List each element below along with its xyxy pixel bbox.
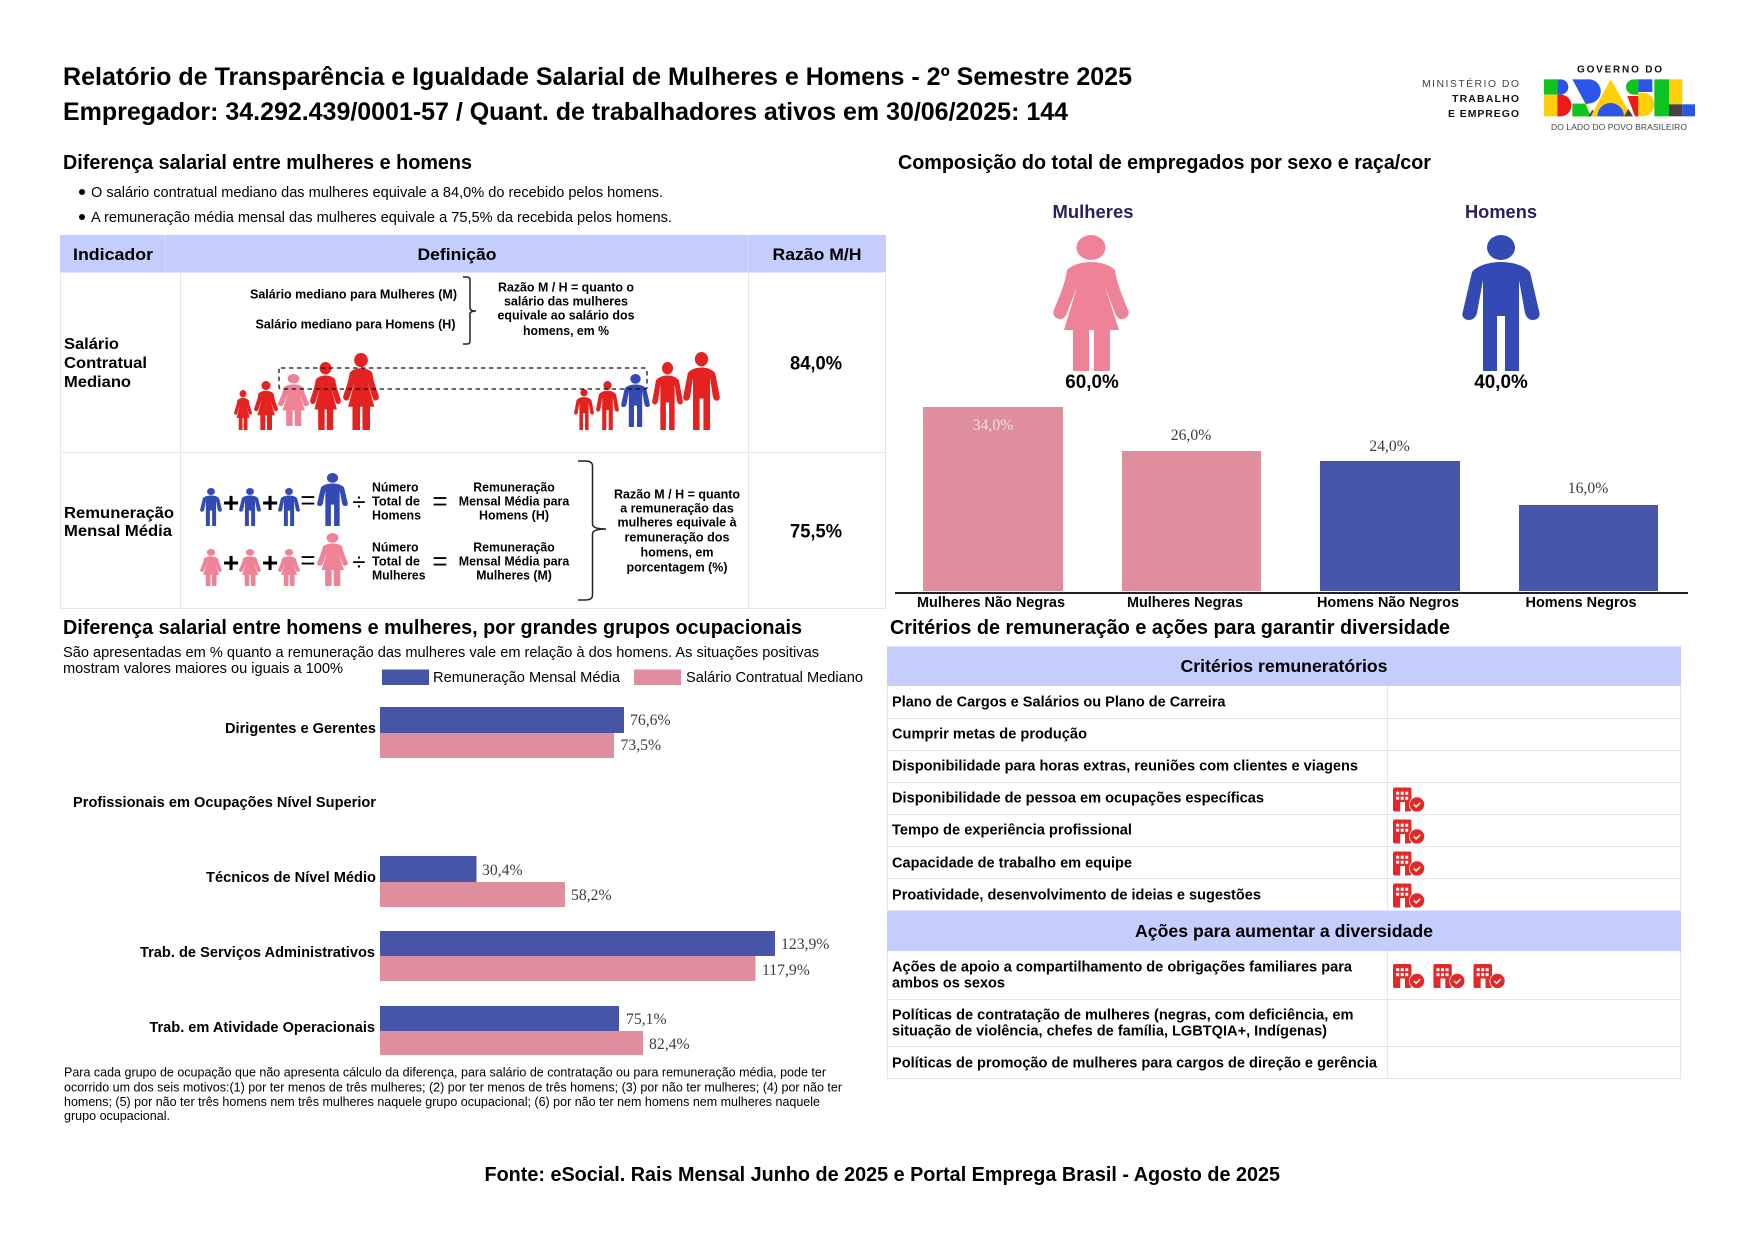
group: dirigentes e gerentes — [225, 707, 671, 758]
logo: Ministério do Trabalho e Emprego: E EMPREGO — [1448, 108, 1519, 120]
source footer: Fonte: eSocial. Rais Mensal Junho de 2025 e Portal Emprega Brasil - Agosto de 2025 — [484, 1164, 1280, 1186]
formula: mulheres: Remuneração — [473, 540, 555, 554]
table header: Razão M/H — [772, 245, 862, 264]
brace and ratio definition: a remuneração das — [620, 502, 734, 516]
title: Relatório de Transparência e Igualdade Salarial de Mulheres e Homens - 2º Semestre 2025 — [63, 63, 1132, 91]
table header: Definição — [418, 245, 496, 264]
criteria list: Cumprir metas de produção — [892, 726, 1087, 742]
group: atividade operacionais: 75,1% — [626, 1011, 667, 1028]
group: serviços administrativos: 117,9% — [762, 962, 810, 979]
definition text: salário mediano: homens, em % — [523, 324, 609, 338]
panel: mulheres 60%: Mulheres — [1052, 201, 1134, 222]
group: técnicos: 30,4% — [482, 862, 523, 879]
panel: mulheres 60% — [1052, 201, 1134, 393]
formula: mulheres: Número — [372, 540, 419, 554]
bullet text block — [79, 184, 672, 226]
footnote — [64, 1064, 843, 1123]
row: remuneração mensal média: 75,5% — [790, 522, 842, 542]
formula: mulheres: Mulheres — [372, 568, 426, 582]
brace and ratio definition — [578, 461, 740, 600]
formula: mulheres: = — [300, 545, 316, 575]
formula: mulheres: Mulheres (M) — [476, 568, 552, 582]
formula: homens: = — [432, 486, 448, 516]
formula: mulheres: + — [262, 547, 278, 578]
dashed link between medians — [279, 368, 647, 389]
definition text: salário mediano: equivale ao salário dos — [498, 308, 635, 322]
header: ações: Ações para aumentar a diversidade — [1135, 921, 1433, 941]
icons: actions markers — [1393, 964, 1506, 989]
criteria list: Capacidade de trabalho em equipe — [892, 856, 1132, 872]
logo: Governo do Brasil — [1544, 64, 1695, 132]
formula: homens: Homens — [372, 508, 421, 522]
panel: homens 40%: Homens — [1465, 201, 1537, 222]
bullet text block: A remuneração média mensal das mulheres equivale a 75,5% da recebida pelos homens. — [91, 209, 672, 226]
chart description: São apresentadas em % quanto a remuneração das mulheres vale em relação à dos homens. As situações positivas — [63, 645, 819, 661]
legend: Remuneração Mensal Média — [433, 670, 621, 686]
brace and ratio definition: mulheres equivale à — [618, 516, 737, 530]
actions list: Políticas de contratação de mulheres (negras, com deficiência, em — [892, 1008, 1354, 1024]
brace and ratio definition: homens, em — [640, 546, 714, 560]
bar chart: sexo e raça/cor: 34,0% — [973, 417, 1013, 434]
definition text: salário mediano: salário das mulheres — [504, 294, 628, 308]
brace and ratio definition: porcentagem (%) — [626, 560, 728, 574]
definition text: salário mediano: Razão M / H = quanto o — [498, 280, 634, 294]
actions list: Ações de apoio a compartilhamento de obrigações familiares para — [892, 960, 1353, 976]
formula: mulheres: + — [223, 547, 239, 578]
formula: homens: Número — [372, 480, 419, 494]
bar chart: sexo e raça/cor: 26,0% — [1171, 427, 1211, 444]
definition text: salário mediano: Salário mediano para Mulheres (M) — [250, 288, 457, 302]
group: dirigentes e gerentes: 76,6% — [630, 712, 671, 729]
actions list: Políticas de promoção de mulheres para cargos de direção e gerência — [892, 1056, 1378, 1072]
formula: homens — [200, 473, 570, 526]
group: técnicos: 58,2% — [571, 887, 612, 904]
group: serviços administrativos: 123,9% — [781, 936, 829, 953]
chart description: mostram valores maiores ou iguais a 100% — [63, 661, 343, 677]
brace and ratio definition: remuneração dos — [624, 530, 730, 544]
table header: Indicador — [73, 245, 153, 264]
row: salário contratual mediano: Salário — [64, 336, 119, 353]
footnote: ocorrido um dos seis motivos:(1) por ter menos de três mulheres; (2) por ter menos de três homens; (3) por não ter mulheres; (4) por não ter — [64, 1080, 843, 1094]
row: salário contratual mediano: 84,0% — [790, 354, 842, 374]
heading: composição: Composição do total de empregados por sexo e raça/cor — [898, 152, 1431, 174]
actions list: situação de violência, chefes de família, LGBTQIA+, Indígenas) — [892, 1024, 1327, 1040]
formula: homens: + — [223, 487, 239, 518]
criteria list: Plano de Cargos e Salários ou Plano de Carreira — [892, 694, 1226, 710]
formula: homens: ÷ — [352, 489, 366, 516]
actions list — [892, 960, 1378, 1072]
row: remuneração mensal média — [64, 505, 842, 542]
bar chart: sexo e raça/cor: Mulheres Negras — [1127, 594, 1243, 611]
group: atividade operacionais — [149, 1006, 690, 1055]
formula: homens: Remuneração — [473, 480, 555, 494]
group: atividade operacionais: Trab. em Atividade Operacionais — [149, 1020, 375, 1036]
bar chart: sexo e raça/cor: 16,0% — [1568, 480, 1608, 497]
formula: homens: = — [300, 485, 316, 515]
logo: Ministério do Trabalho e Emprego — [1422, 77, 1519, 120]
icons: homens em fila — [574, 352, 720, 430]
heading: diferença salarial: Diferença salarial entre mulheres e homens — [63, 152, 472, 174]
chart description — [63, 645, 819, 677]
criteria list: Tempo de experiência profissional — [892, 822, 1132, 838]
row: salário contratual mediano: Mediano — [64, 374, 131, 391]
bullet text block: O salário contratual mediano das mulheres equivale a 84,0% do recebido pelos homens. — [91, 184, 663, 201]
legend — [382, 670, 863, 686]
logo: Governo do Brasil: GOVERNO DO — [1577, 64, 1662, 76]
criteria list: Disponibilidade para horas extras, reuniões com clientes e viagens — [892, 758, 1358, 774]
panel: tabela indicadores — [60, 235, 886, 608]
group: profissionais nível superior: Profissionais em Ocupações Nível Superior — [73, 795, 376, 811]
panel: homens 40% — [1462, 201, 1540, 393]
brace and ratio definition: Razão M / H = quanto — [614, 488, 740, 502]
heading: critérios: Critérios de remuneração e ações para garantir diversidade — [890, 617, 1450, 639]
definition text: salário mediano: Salário mediano para Homens (H) — [256, 318, 456, 332]
group: serviços administrativos: Trab. de Serviços Administrativos — [140, 945, 375, 961]
panel: tabela de critérios — [887, 646, 1681, 1078]
group: atividade operacionais: 82,4% — [649, 1036, 690, 1053]
row: remuneração mensal média: Mensal Média — [64, 523, 172, 540]
formula: homens: Mensal Média para — [459, 494, 570, 508]
formula: mulheres — [200, 533, 570, 586]
bar chart: sexo e raça/cor: Homens Negros — [1526, 594, 1636, 611]
icons: criteria markers — [1393, 788, 1425, 908]
title — [63, 63, 1132, 126]
row: salário contratual mediano — [64, 336, 842, 391]
formula: mulheres: Mensal Média para — [459, 554, 570, 568]
header: ações — [887, 910, 1681, 951]
criteria list: Disponibilidade de pessoa em ocupações específicas — [892, 790, 1264, 806]
group: técnicos: Técnicos de Nível Médio — [206, 870, 376, 886]
logo: Governo do Brasil: DO LADO DO POVO BRASILEIRO — [1551, 122, 1687, 132]
criteria list: Proatividade, desenvolvimento de ideias e sugestões — [892, 888, 1261, 904]
formula: homens: Homens (H) — [479, 508, 549, 522]
actions list: ambos os sexos — [892, 976, 1005, 992]
row: remuneração mensal média: Remuneração — [64, 505, 174, 522]
formula: mulheres: Total de — [372, 554, 420, 568]
heading: grupos ocupacionais: Diferença salarial entre homens e mulheres, por grandes grupos ocupacionais — [63, 617, 802, 639]
header: critérios remuneratórios: Critérios remuneratórios — [1180, 656, 1388, 676]
formula: mulheres: = — [432, 546, 448, 576]
panel: homens 40%: 40,0% — [1474, 372, 1528, 393]
group: dirigentes e gerentes: 73,5% — [620, 737, 661, 754]
group: técnicos — [206, 856, 612, 907]
formula: homens: + — [262, 487, 278, 518]
legend: Salário Contratual Mediano — [686, 670, 863, 686]
group: dirigentes e gerentes: Dirigentes e Gerentes — [225, 721, 376, 737]
footnote: Para cada grupo de ocupação que não apresenta cálculo da diferença, para salário de contratação ou para remuneração média, pode ter — [64, 1064, 827, 1080]
bar chart: sexo e raça/cor: 24,0% — [1369, 438, 1410, 455]
footnote: homens; (5) por não ter três homens nem três mulheres naquele grupo ocupacional; (6) por não ter nem homens nem mulheres naquele — [64, 1094, 820, 1109]
icons: mulheres em fila — [234, 353, 379, 430]
bar chart: grupos ocupacionais — [73, 707, 829, 1055]
bar chart: sexo e raça/cor: Homens Não Negros — [1317, 594, 1459, 611]
criteria list — [892, 694, 1358, 904]
logo: Ministério do Trabalho e Emprego: TRABALHO — [1452, 93, 1519, 105]
formula: mulheres: ÷ — [352, 549, 366, 576]
header: critérios remuneratórios — [887, 646, 1681, 686]
group: serviços administrativos — [140, 931, 829, 981]
bar chart: sexo e raça/cor — [895, 407, 1688, 611]
bar chart: sexo e raça/cor: Mulheres Não Negras — [917, 594, 1065, 611]
title: Empregador: 34.292.439/0001-57 / Quant. de trabalhadores ativos em 30/06/2025: 144 — [63, 98, 1068, 126]
row: salário contratual mediano: Contratual — [64, 355, 147, 372]
definition text: salário mediano — [250, 277, 635, 344]
formula: homens: Total de — [372, 494, 420, 508]
table header — [60, 235, 886, 272]
panel: mulheres 60%: 60,0% — [1065, 372, 1119, 393]
logo: Ministério do Trabalho e Emprego: MINISTÉRIO DO — [1422, 77, 1519, 90]
footnote: grupo ocupacional. — [64, 1108, 170, 1123]
